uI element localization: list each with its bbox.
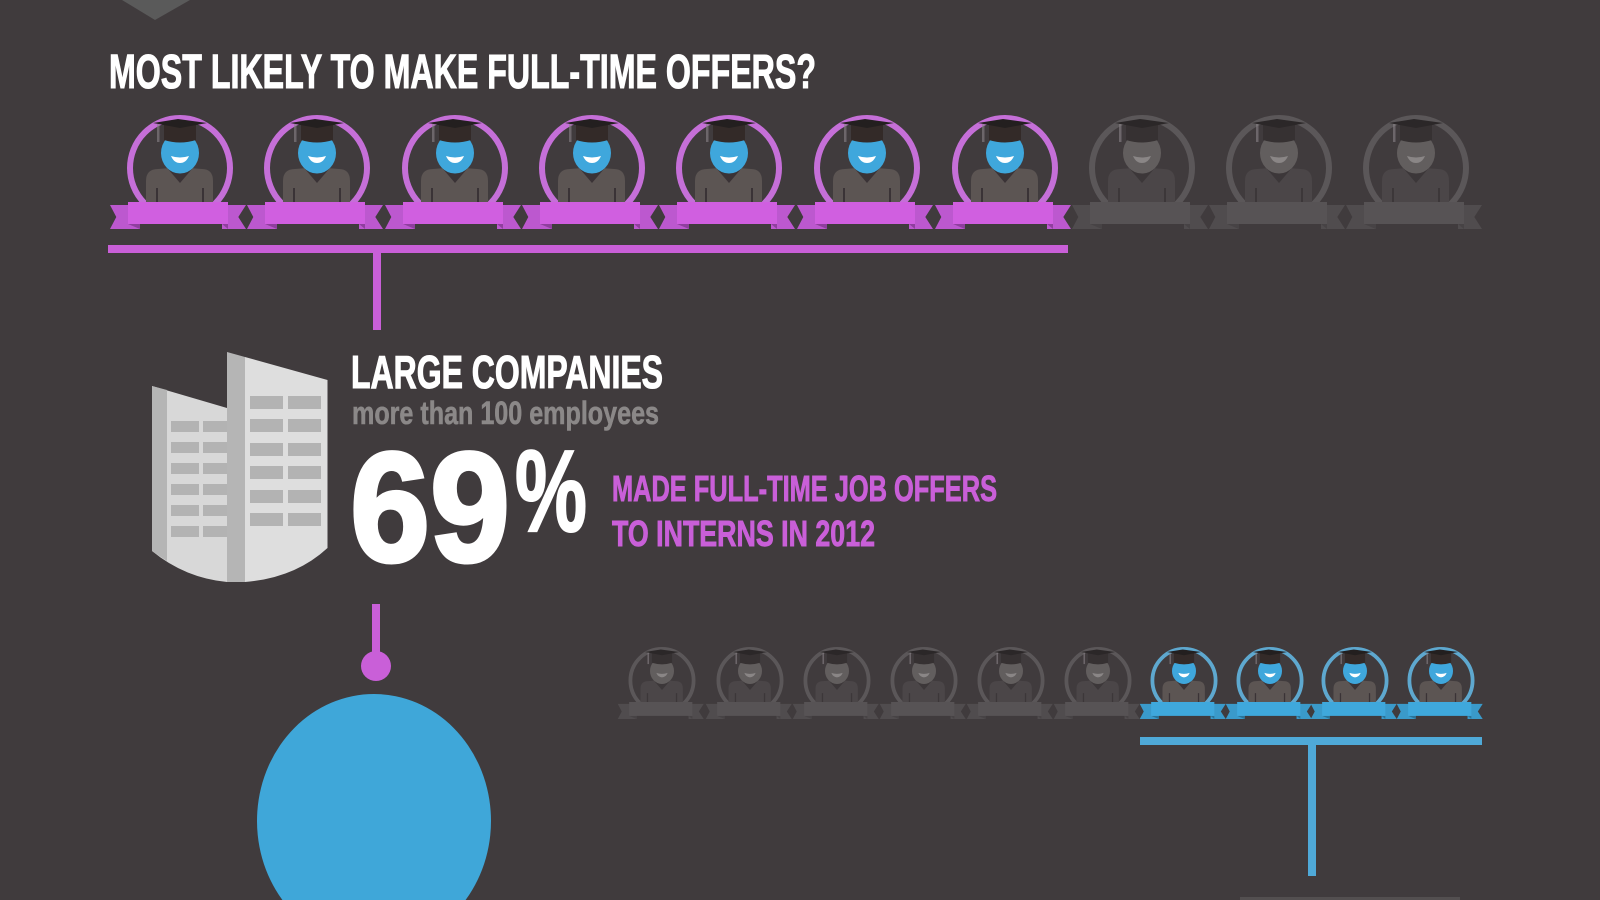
big number: 69 percent: 69 <box>350 421 510 595</box>
pictogram row: 7 of 10 graduates, large companies <box>110 118 1482 229</box>
title: MOST LIKELY TO MAKE FULL-TIME OFFERS? <box>109 46 816 99</box>
callout text: large companies: TO INTERNS IN 2012 <box>612 513 875 554</box>
callout text: large companies: MADE FULL-TIME JOB OFFERS <box>612 468 997 509</box>
connector with dot <box>361 604 391 681</box>
callout text: large companies <box>612 468 997 554</box>
pictogram row: 4 of 10 graduates, small companies <box>618 649 1483 719</box>
blue circle <box>257 694 491 900</box>
faint tops of the heading cut off by the frame edge <box>1240 897 1460 900</box>
big number: 69 percent: % <box>515 426 587 556</box>
icon: office buildings <box>152 352 328 582</box>
subheading: company size: more than 100 employees <box>352 395 659 431</box>
pink bracket <box>108 245 1068 330</box>
pointer triangle <box>122 0 190 20</box>
heading: large companies: LARGE COMPANIES <box>351 346 663 398</box>
blue bracket <box>1140 737 1482 876</box>
